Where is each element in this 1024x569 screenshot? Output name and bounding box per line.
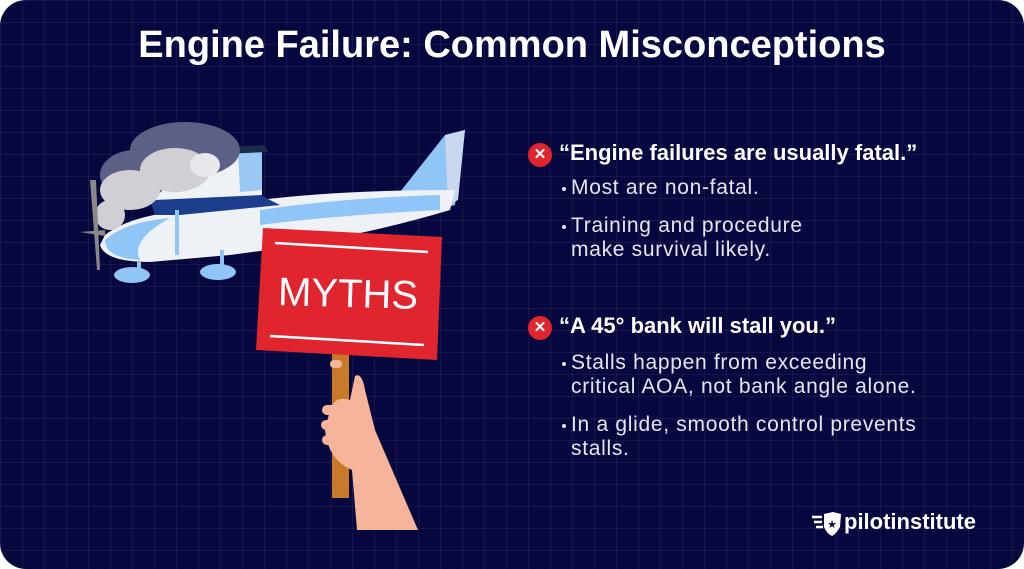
bullet: Training and procedure (571, 214, 803, 237)
logo: pilotinstitute (844, 509, 976, 534)
bullet (571, 413, 917, 461)
heading: “Engine failures are usually fatal.” (559, 140, 917, 165)
bullet: Most are non-fatal. (571, 176, 759, 199)
icon: x (528, 316, 552, 340)
logo: ★ (827, 519, 837, 531)
myths sign (256, 228, 442, 530)
icon: x (528, 143, 552, 167)
bullet: make survival likely. (571, 238, 771, 261)
bullet (571, 351, 917, 399)
myth 1 (528, 140, 917, 261)
myths sign: MYTHS (277, 270, 419, 318)
bullet: critical AOA, not bank angle alone. (571, 375, 917, 398)
icon: x: ✕ (534, 319, 546, 336)
plane (80, 122, 465, 283)
title: Engine Failure: Common Misconceptions (138, 24, 886, 66)
bullet: In a glide, smooth control prevents (571, 413, 917, 436)
bullet (571, 214, 803, 262)
heading: “A 45° bank will stall you.” (559, 313, 836, 338)
icon: x: ✕ (534, 146, 546, 163)
myth 2 (528, 313, 917, 460)
bullet: Stalls happen from exceeding (571, 351, 867, 374)
bullet: stalls. (571, 437, 630, 460)
